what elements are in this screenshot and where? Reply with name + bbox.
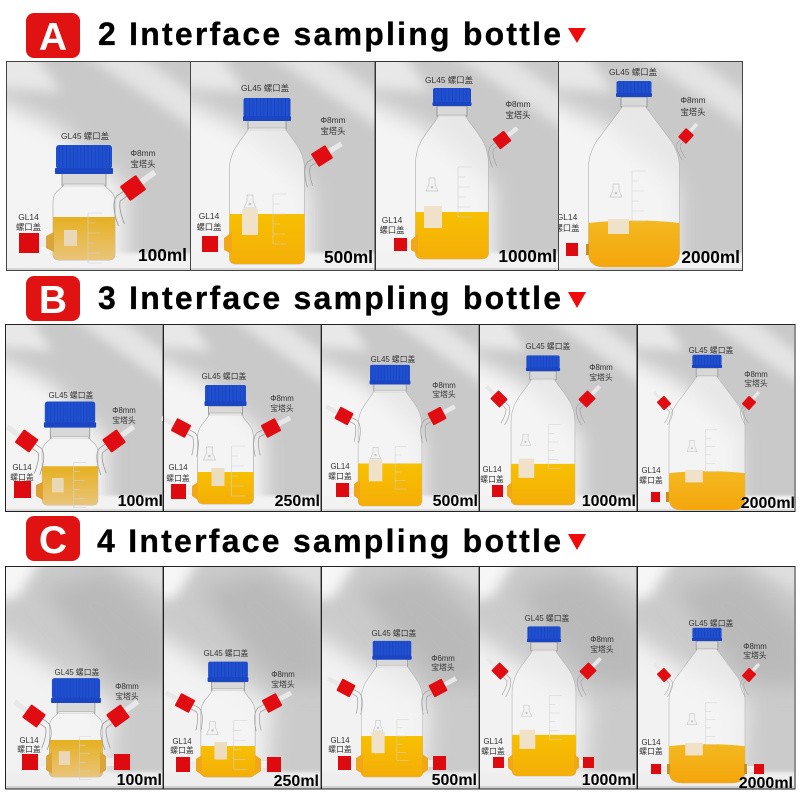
labels: Φ8mm (743, 642, 767, 651)
bottle (49, 678, 103, 780)
photo background (301, 302, 497, 535)
labels: 螺口盖 (328, 744, 352, 754)
volume: 500ml (433, 493, 478, 510)
photo background (617, 302, 800, 535)
labels: GL14 (172, 737, 192, 746)
labels: 螺口盖 (328, 471, 352, 481)
panel: C 2000ml (613, 552, 800, 800)
labels: 螺口盖 (17, 744, 41, 754)
volume: 100ml (138, 245, 187, 265)
arrow B (568, 292, 586, 308)
labels (480, 341, 613, 484)
labels (166, 371, 294, 483)
bottle (230, 98, 304, 264)
arrow A (568, 28, 586, 43)
labels: Φ8mm (271, 670, 295, 679)
photo background (0, 552, 176, 800)
bottle (53, 145, 115, 263)
labels: GL14 (483, 737, 503, 746)
labels: GL45 螺口盖 (241, 83, 289, 93)
labels: 宝塔头 (590, 644, 614, 654)
photo background (0, 37, 212, 297)
photo background (613, 552, 800, 800)
GL14 cap (566, 243, 589, 256)
panel: B 2000ml (617, 302, 800, 535)
labels: GL45 螺口盖 (525, 613, 570, 623)
GL14 cap (171, 482, 198, 500)
GL14 cap (492, 482, 512, 500)
photo background (139, 552, 334, 800)
labels: GL45 螺口盖 (526, 341, 571, 351)
volume: 250ml (275, 493, 320, 510)
labels: GL45 螺口盖 (689, 618, 734, 628)
labels: 宝塔头 (431, 662, 455, 672)
sampling arms (644, 661, 769, 698)
sampling arms (320, 673, 464, 716)
volume: 1000ml (582, 772, 636, 789)
labels: 宝塔头 (505, 110, 531, 120)
badge C: C (39, 519, 67, 562)
labels: GL45 螺口盖 (371, 354, 416, 364)
labels: GL14 (199, 211, 220, 221)
labels: GL14 (482, 465, 502, 474)
bottle (358, 365, 422, 506)
labels top: GL45 螺口盖 (609, 67, 657, 77)
sampling arms (318, 401, 463, 444)
bottle (201, 662, 255, 777)
labels: 螺口盖 (10, 472, 34, 482)
bottle (42, 402, 98, 508)
panel: A 500ml (166, 37, 397, 297)
badge A (26, 13, 80, 59)
sampling arms (153, 412, 299, 458)
labels: Φ8mm (744, 370, 768, 379)
labels: Φ8mm (112, 406, 136, 415)
labels: 宝塔头 (432, 389, 456, 399)
labels: Φ8mm (270, 394, 294, 403)
GL14 caps (651, 764, 764, 774)
bottle (669, 355, 745, 510)
labels: GL14 (641, 466, 661, 475)
panel: A 2000ml (558, 61, 743, 271)
labels: 螺口盖 (166, 473, 190, 483)
GL14 cap (14, 481, 43, 500)
volume: 100ml (117, 772, 162, 789)
labels: GL45 螺口盖 (372, 628, 417, 638)
labels: GL14 (330, 736, 350, 745)
labels: 螺口盖 (16, 222, 41, 232)
border (638, 566, 795, 789)
labels: 宝塔头 (270, 403, 294, 413)
badge B: B (39, 279, 67, 322)
sampling arms (476, 654, 612, 698)
photo background (0, 302, 181, 535)
sampling arms (2, 695, 150, 751)
section A heading (26, 13, 586, 59)
labels: Φ8mm (115, 682, 139, 691)
panel: A 100ml (0, 37, 212, 297)
sampling arms (475, 382, 611, 426)
GL14 cap (651, 492, 669, 502)
photo background (455, 552, 651, 800)
labels: GL45 螺口盖 (49, 390, 94, 400)
sampling arm (293, 137, 352, 189)
GL14 caps (493, 754, 594, 772)
border (190, 62, 375, 270)
sampling arm (479, 123, 528, 169)
border (322, 324, 479, 512)
labels (559, 214, 580, 232)
labels (328, 628, 455, 754)
title C: 4 Interface sampling bottle (97, 523, 561, 559)
border (558, 62, 742, 270)
labels: 螺口盖 (170, 745, 194, 755)
labels (639, 618, 767, 756)
panel: B 250ml (143, 302, 339, 535)
GL14 cap (202, 232, 232, 254)
GL14 cap (336, 480, 360, 500)
sampling arms (0, 420, 146, 476)
GL14 caps (176, 755, 281, 775)
bottle (361, 641, 423, 777)
photo background (459, 302, 656, 535)
volume: 500ml (324, 247, 373, 267)
labels (17, 667, 139, 754)
labels: GL14 (18, 212, 39, 222)
labels: 宝塔头 (112, 415, 136, 425)
panel: C 500ml (297, 552, 492, 800)
labels (639, 345, 768, 485)
labels: 宝塔头 (130, 159, 156, 169)
labels: GL45 螺口盖 (202, 371, 247, 381)
sampling arms (644, 389, 769, 426)
labels: 宝塔头 (115, 691, 139, 701)
photo background (297, 552, 492, 800)
labels: GL14 (168, 463, 188, 472)
photo background (166, 37, 397, 297)
labels: 宝塔头 (743, 650, 767, 660)
section B heading (26, 276, 586, 322)
labels: GL45 螺口盖 (425, 75, 473, 85)
photo background (143, 302, 339, 535)
volume: 100ml (118, 493, 163, 510)
sampling arms (157, 687, 300, 733)
labels: 螺口盖 (481, 746, 505, 756)
border (376, 62, 558, 270)
border (480, 566, 637, 789)
labels: GL45 螺口盖 (55, 667, 100, 677)
border (638, 324, 795, 512)
labels (481, 613, 614, 756)
arrow C (568, 534, 586, 550)
border (6, 566, 163, 789)
title B: 3 Interface sampling bottle (98, 280, 561, 316)
photo background (351, 37, 580, 297)
sampling arm (100, 165, 169, 227)
bottle (588, 81, 680, 267)
labels: 螺口盖 (480, 474, 504, 484)
labels top (609, 67, 706, 117)
GL14 caps (338, 754, 446, 774)
labels: 螺口盖 (379, 225, 405, 235)
border (6, 324, 163, 512)
border (480, 324, 637, 512)
labels: GL14 (382, 215, 403, 225)
labels: GL14 (557, 212, 578, 222)
border (164, 566, 321, 789)
labels: GL45 螺口盖 (61, 131, 109, 141)
panel: C 100ml (0, 552, 176, 800)
labels: GL14 (641, 738, 661, 747)
volume: 2000ml (681, 247, 740, 267)
badge C (26, 516, 80, 562)
labels: Φ8mm (589, 363, 613, 372)
GL14 cap (19, 232, 54, 253)
volume: 2000ml (741, 495, 795, 512)
volume: 250ml (274, 773, 319, 790)
badge A: A (39, 16, 67, 59)
labels: 宝塔头 (320, 126, 346, 136)
panel: B 500ml (301, 302, 497, 535)
panel: C 250ml (139, 552, 334, 800)
volume: 500ml (432, 772, 477, 789)
sampling arm (668, 120, 708, 161)
bottle (669, 628, 745, 783)
labels: Φ8mm (320, 115, 346, 125)
labels: 宝塔头 (744, 378, 768, 388)
labels: GL45 螺口盖 (689, 345, 734, 355)
labels: 螺口盖 (639, 475, 663, 485)
badge B (26, 276, 80, 322)
labels: Φ8mm (590, 635, 614, 644)
labels: GL14 (19, 736, 39, 745)
volume: 1000ml (582, 493, 636, 510)
labels: 螺口盖 (554, 223, 580, 233)
volume: 1000ml (498, 246, 557, 266)
bottle (512, 626, 576, 776)
bottle (416, 88, 488, 259)
border (164, 324, 321, 512)
labels top: Φ8mm (680, 95, 706, 105)
labels: Φ8mm (505, 99, 531, 109)
labels: Φ8mm (432, 381, 456, 390)
labels: 螺口盖 (639, 746, 663, 756)
labels (196, 83, 346, 232)
panel: A 1000ml (351, 37, 580, 297)
section C heading (26, 516, 586, 562)
title A: 2 Interface sampling bottle (98, 16, 561, 52)
panel: C 1000ml (455, 552, 651, 800)
labels (170, 648, 295, 755)
border (322, 566, 479, 789)
panel: B 1000ml (459, 302, 656, 535)
labels top: 宝塔头 (680, 107, 706, 117)
photo background (534, 37, 764, 297)
labels: Φ8mm (130, 148, 156, 158)
GL14 cap (394, 234, 418, 254)
bottle (511, 355, 575, 505)
labels: 宝塔头 (271, 679, 295, 689)
border (6, 62, 190, 270)
labels: GL14 (330, 462, 350, 471)
labels: GL45 螺口盖 (204, 648, 249, 658)
labels: GL14 (12, 463, 32, 472)
labels: 宝塔头 (589, 372, 613, 382)
labels (16, 131, 156, 232)
volume: 2000ml (739, 775, 793, 792)
labels (328, 354, 456, 481)
labels (379, 75, 531, 235)
GL14 caps (22, 752, 130, 774)
panel: B 100ml (0, 302, 181, 535)
labels: Φ6mm (431, 654, 455, 663)
labels (10, 390, 136, 482)
labels: 螺口盖 (196, 222, 222, 232)
bottle (198, 385, 254, 504)
